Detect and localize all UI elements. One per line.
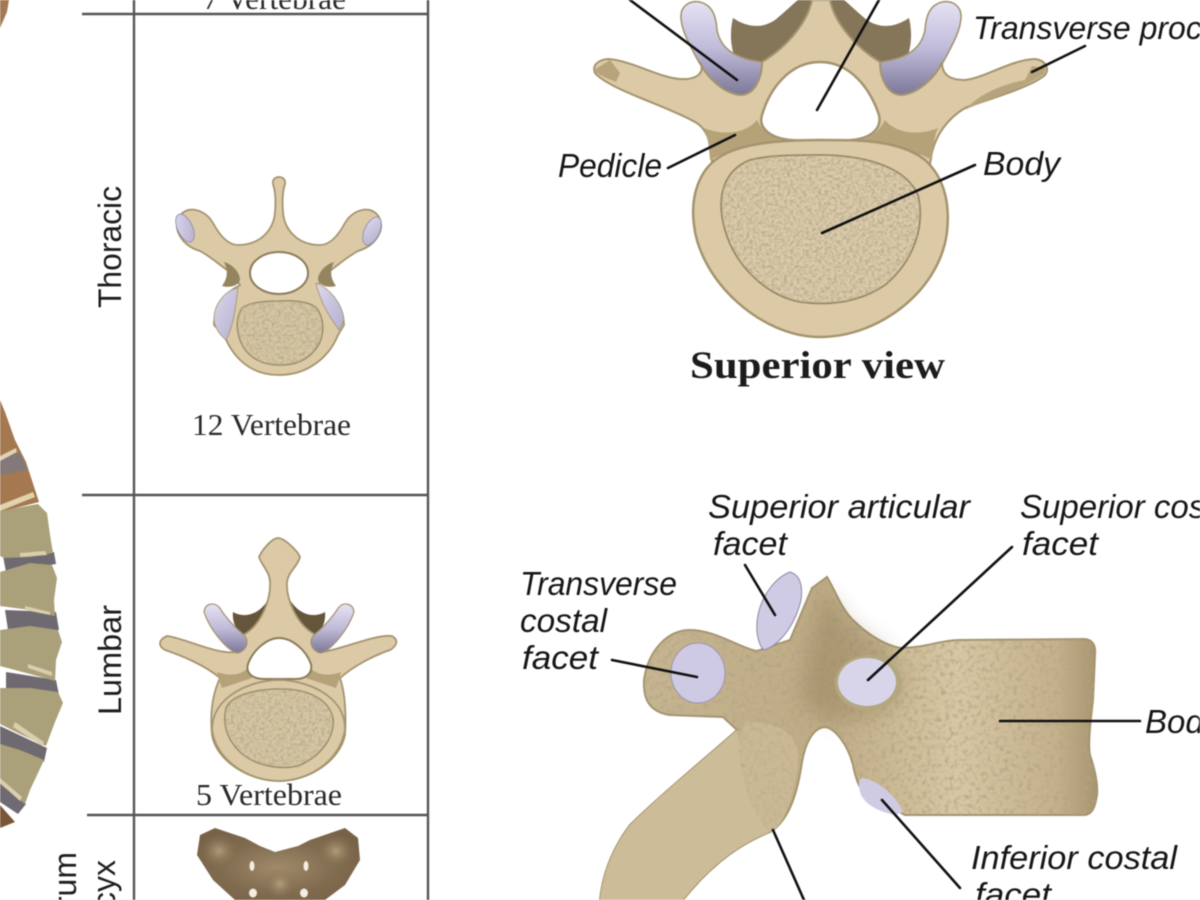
cancellous body (225, 689, 333, 767)
label: Superior articular facet: facet (713, 525, 789, 562)
intervertebral discs (0, 552, 59, 814)
lateral view vertebra illustration (600, 572, 1097, 900)
lateral bone speckle (644, 577, 1097, 815)
superior articular processes (681, 2, 762, 95)
neural foramen (761, 62, 880, 142)
superior articular facet (757, 572, 802, 650)
label: Transverse costal facet: costal (520, 602, 609, 639)
label: Inferior costal facet: Inferior costal (971, 839, 1179, 876)
label: Superior articular facet: Superior articular (708, 488, 972, 525)
body rim (212, 680, 345, 781)
label: Transverse costal facet: facet (522, 639, 600, 676)
count: 5 Vertebrae: 5 Vertebrae (196, 777, 342, 812)
vertebra bone (177, 177, 381, 375)
neural arch and transverse processes (594, 0, 1047, 165)
vertebra bone (160, 538, 396, 781)
transverse costal facet (671, 643, 725, 703)
pedicle shading (704, 120, 938, 160)
superior view vertebra illustration (594, 0, 1047, 337)
label: Inferior costal facet (971, 839, 1179, 900)
sacrum illustration (197, 828, 360, 900)
count: 12 Vertebrae: 12 Vertebrae (192, 407, 351, 442)
label: Transverse costal facet (520, 565, 677, 676)
pedicle shadows (222, 262, 336, 287)
darker central shading (800, 590, 905, 722)
caption: Superior view: Superior view (690, 344, 945, 387)
neural foramen (250, 252, 308, 294)
row label: Thoracic: Thoracic (92, 186, 128, 308)
mamillary shadows (731, 0, 911, 62)
label: Superior articular facet (708, 488, 972, 562)
neural foramen (247, 638, 311, 679)
lateral view leader lines (612, 547, 1140, 900)
inferior articular strip (738, 722, 798, 832)
spine column illustration (left edge) (0, 0, 63, 828)
superior view leader lines (630, 0, 1085, 233)
table grid (82, 0, 428, 900)
upper spine fragment (0, 0, 9, 28)
superior costal facet (835, 655, 901, 711)
superior articular processes (204, 604, 247, 653)
label: Transverse costal facet: Transverse (520, 565, 677, 602)
costal facets (172, 211, 198, 245)
label: Superior costal facet (1020, 488, 1200, 562)
rib-side transverse root smooth area (600, 730, 770, 900)
label: Superior costal facet: facet (1022, 525, 1100, 562)
lumbar vertebrae of the spine (0, 504, 63, 828)
transverse tip shading (594, 60, 1046, 110)
label: Pedicle: Pedicle (558, 147, 662, 184)
cancellous body (237, 301, 323, 365)
thoracic vertebrae of the spine (0, 400, 39, 512)
thoracic vertebra illustration (172, 177, 385, 375)
inferior costal facet (859, 778, 903, 815)
sacral foramina (249, 861, 308, 898)
cancellous body (721, 155, 920, 303)
body rim (693, 140, 948, 337)
lumbar vertebra illustration (160, 538, 396, 781)
mamillary shadows (233, 600, 325, 640)
label: Body: Body (983, 145, 1063, 182)
row label: Lumbar: Lumbar (92, 605, 128, 715)
bone silhouette (600, 577, 1097, 900)
pedicle shading (217, 668, 341, 688)
